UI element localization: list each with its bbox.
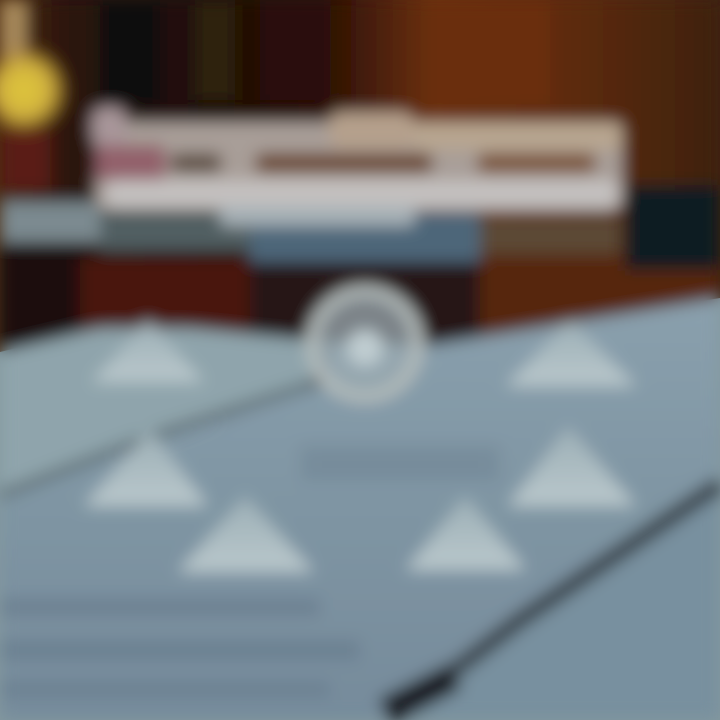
- icon: triangle middle left: [84, 430, 208, 506]
- pale blue document sheets: [0, 298, 720, 720]
- icon: triangle lower right: [406, 496, 526, 570]
- background: lamp glow: [0, 0, 70, 190]
- dark fold lines: [0, 385, 720, 712]
- icon: triangle top left: [92, 320, 204, 382]
- icon: triangle lower left: [178, 496, 314, 572]
- subtitle lower tab: [220, 206, 415, 226]
- title blob left: [92, 107, 126, 147]
- icon: triangle top right: [506, 320, 636, 386]
- base layer: sheets: [0, 298, 720, 720]
- title panel: [96, 122, 622, 210]
- darker middle row: [170, 153, 596, 173]
- blue-grey strip behind subtitle: [0, 202, 620, 262]
- light triangle icons: [84, 320, 636, 572]
- title blob centre: [329, 112, 414, 148]
- title tint left: [96, 145, 166, 181]
- background: wooden wall: [0, 0, 720, 420]
- heading block (illegible in reference): [92, 107, 622, 226]
- title tint right: [414, 122, 622, 150]
- text-like shading on sheets: [0, 445, 500, 696]
- dark red band below heading: [0, 185, 720, 370]
- icon: central circle badge: [312, 291, 418, 397]
- subtitle line: [106, 180, 618, 208]
- icon: triangle middle right: [508, 426, 636, 506]
